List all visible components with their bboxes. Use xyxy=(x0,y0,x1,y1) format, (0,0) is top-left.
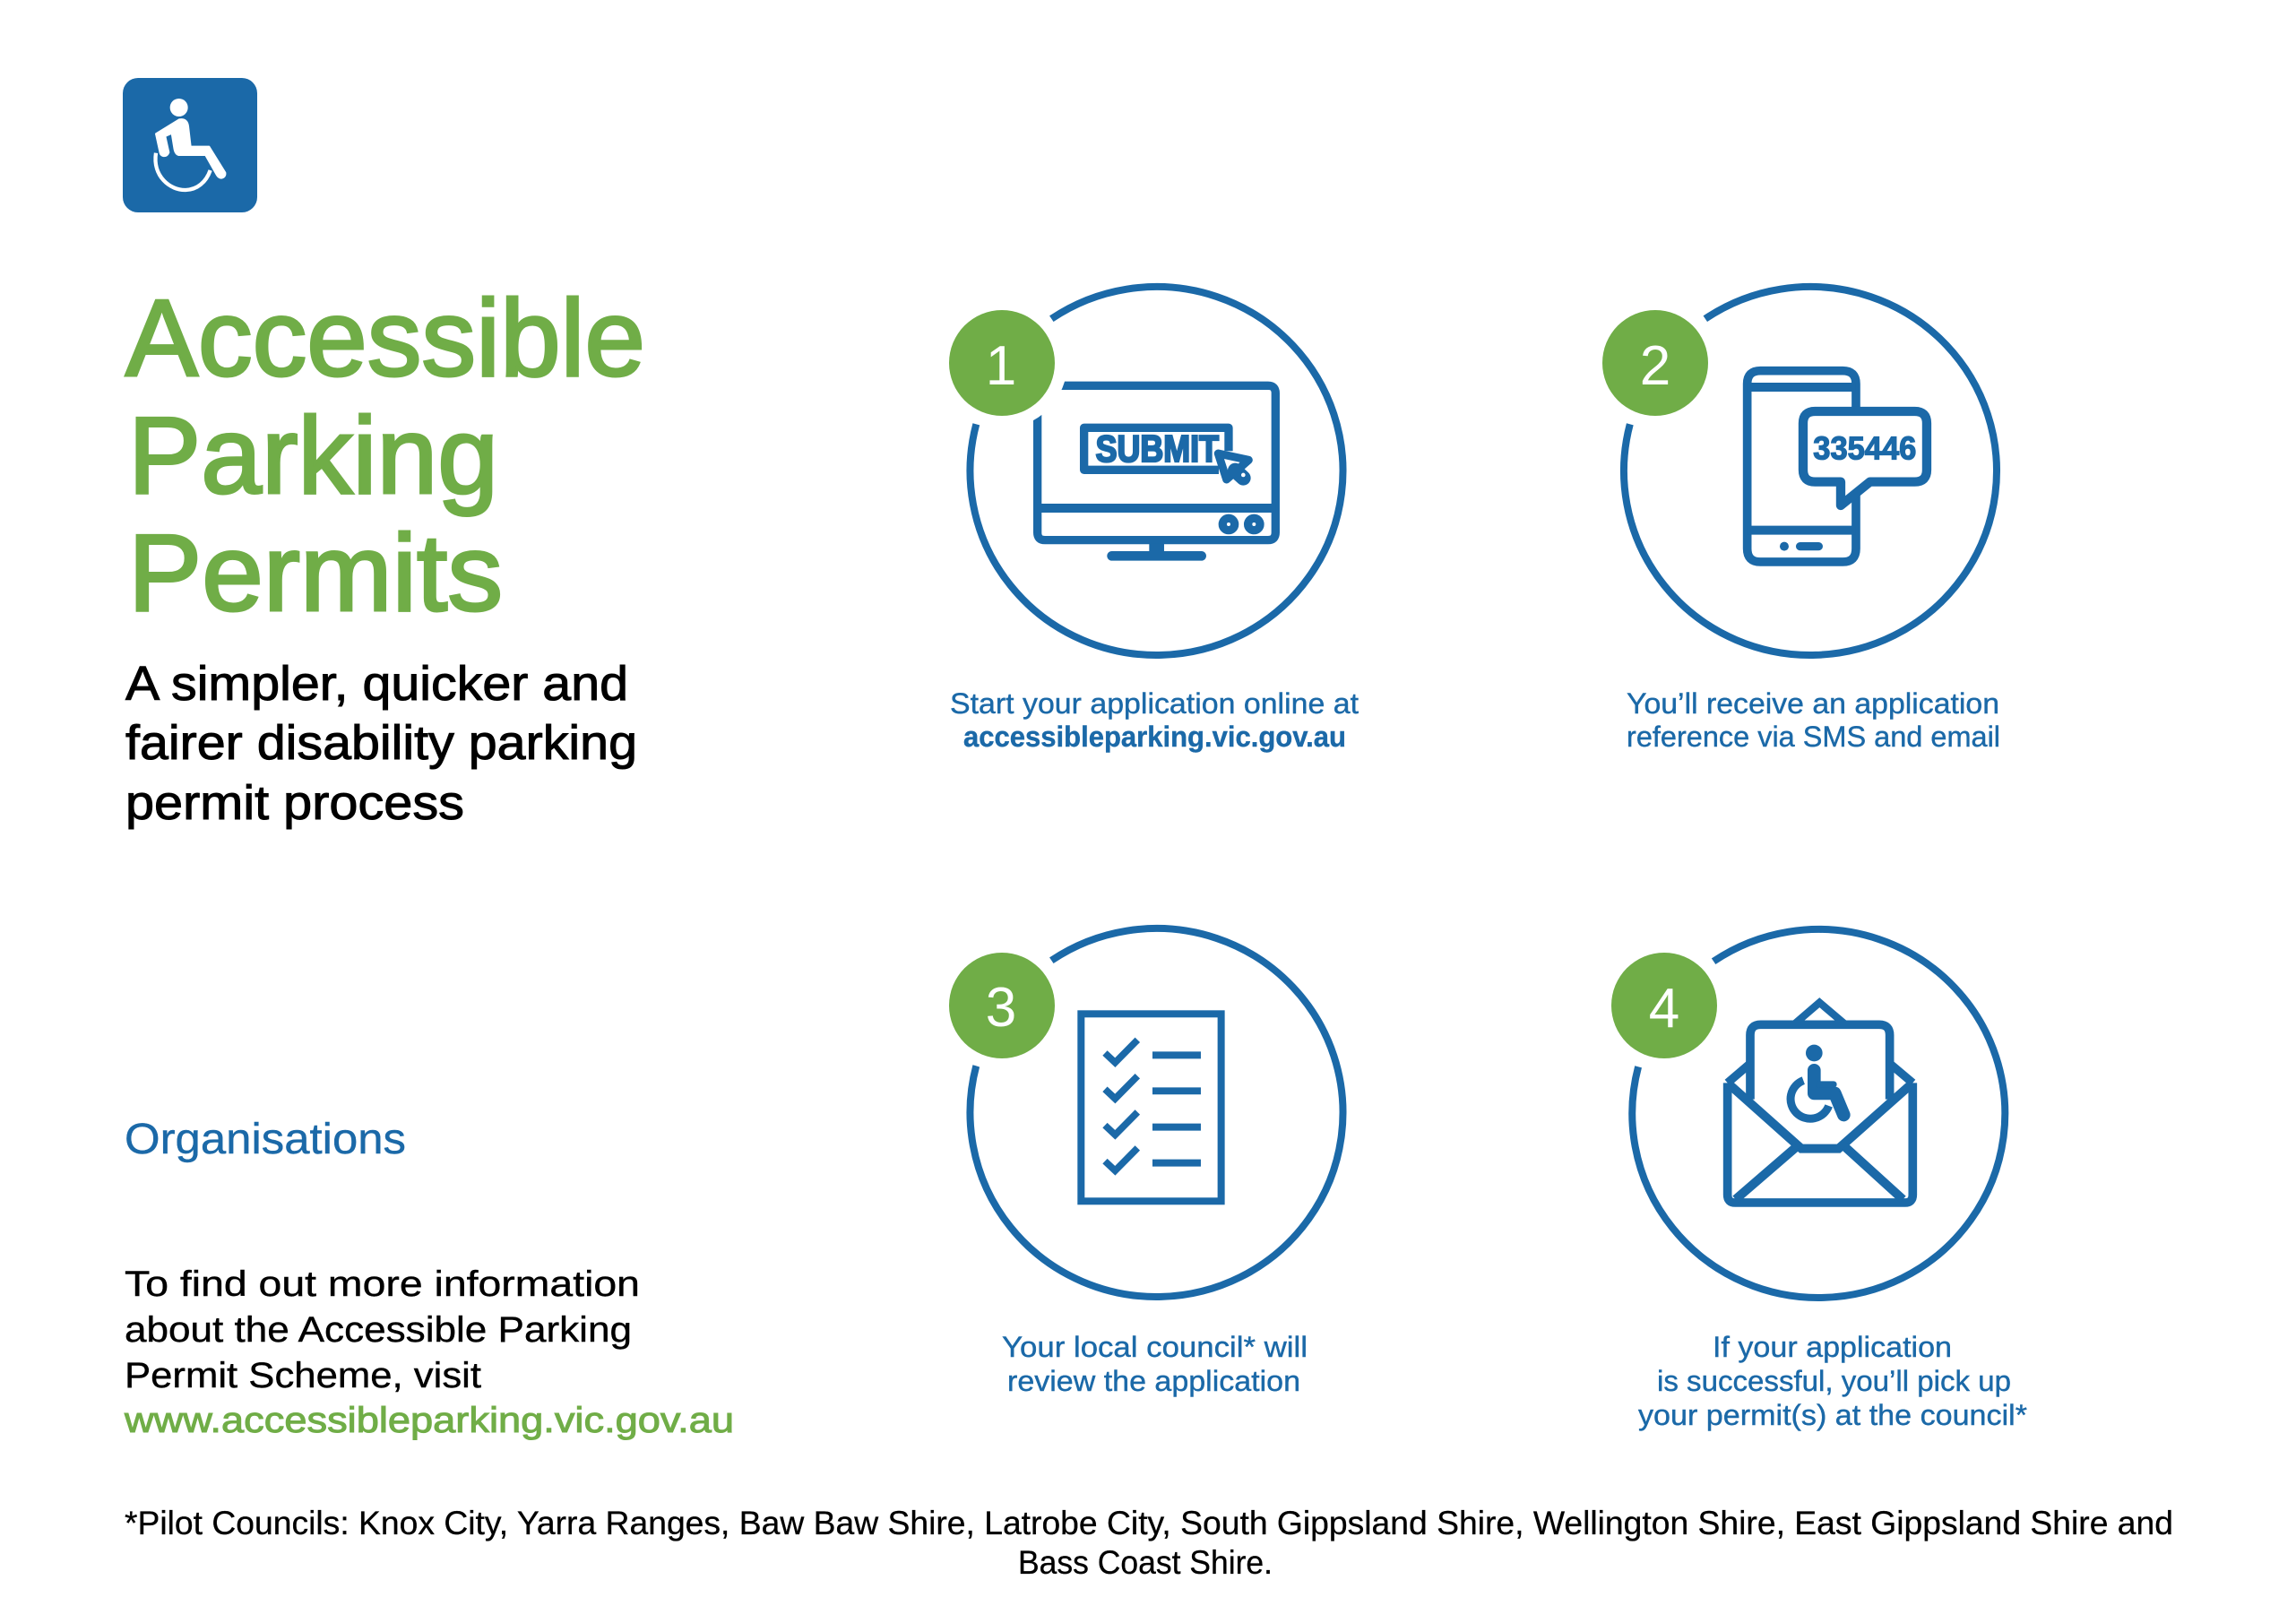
subtitle xyxy=(125,657,637,830)
step 1 caption xyxy=(950,687,1359,753)
step 4 panel xyxy=(1599,929,2027,1431)
icon: computer with submit button: SUBMIT xyxy=(1096,428,1219,470)
icon: phone with SMS bubble xyxy=(1748,371,1927,562)
step 3 badge: 3 xyxy=(986,977,1016,1039)
text block: more information: about the Accessible Parking xyxy=(125,1310,632,1350)
text block: more information: Permit Scheme, visit xyxy=(125,1356,481,1395)
step 2 badge: 2 xyxy=(1640,335,1670,397)
step 1 panel xyxy=(937,287,1359,753)
step 3 caption: review the application xyxy=(1007,1365,1300,1397)
step 1 badge xyxy=(937,298,1067,428)
title: Accessible xyxy=(125,277,645,399)
subtitle: A simpler, quicker and xyxy=(125,657,628,711)
footnote: pilot councils: *Pilot Councils: Knox City, Yarra Ranges, Baw Baw Shire, Latrobe City, South Gippsland Shire, Wellington Shire, East Gippsland Shire and xyxy=(125,1505,2173,1541)
icon: phone with SMS bubble: 335446 xyxy=(1813,430,1916,467)
step 2 caption xyxy=(1627,687,2000,753)
step 1 badge: 1 xyxy=(986,335,1016,397)
icon: checklist xyxy=(1081,1014,1221,1201)
subtitle: fairer disability parking xyxy=(125,716,637,770)
step 3 panel xyxy=(937,928,1342,1397)
title xyxy=(125,277,645,634)
icon: envelope with accessible permit xyxy=(1728,1003,1912,1203)
text block: more information: www.accessibleparking.vic.gov.au xyxy=(124,1401,734,1440)
step 2 ring xyxy=(1624,287,1997,655)
icon: computer with submit button xyxy=(1038,385,1275,561)
step 2 badge xyxy=(1590,298,1721,428)
heading: organisations: Organisations xyxy=(125,1116,406,1163)
title: Parking xyxy=(128,394,498,516)
step 2 caption: reference via SMS and email xyxy=(1627,721,2000,753)
step 4 caption: is successful, you’ll pick up xyxy=(1657,1365,2011,1397)
icon: accessible parking logo xyxy=(123,78,257,212)
step 4 caption: If your application xyxy=(1713,1331,1952,1363)
title: Permits xyxy=(128,512,503,634)
step 3 caption xyxy=(1002,1331,1308,1397)
step 3 caption: Your local council* will xyxy=(1002,1331,1308,1363)
step 3 ring xyxy=(970,928,1342,1297)
step 1 ring xyxy=(970,287,1342,655)
step 4 badge: 4 xyxy=(1649,978,1679,1040)
step 1 caption: Start your application online at xyxy=(950,687,1359,720)
text block: more information xyxy=(124,1265,734,1440)
step 2 panel xyxy=(1590,287,2000,753)
step 4 caption: your permit(s) at the council* xyxy=(1638,1399,2027,1431)
step 1 caption: accessibleparking.vic.gov.au xyxy=(963,721,1346,753)
step 4 badge xyxy=(1599,940,1730,1071)
step 3 badge xyxy=(937,940,1067,1071)
footnote: pilot councils: Bass Coast Shire. xyxy=(1018,1544,1273,1581)
step 4 ring xyxy=(1632,929,2005,1298)
subtitle: permit process xyxy=(125,776,464,830)
step 4 caption xyxy=(1638,1331,2027,1431)
step 2 caption: You’ll receive an application xyxy=(1627,687,1999,720)
footnote: pilot councils xyxy=(125,1505,2173,1581)
text block: more information: To find out more information xyxy=(125,1265,640,1304)
